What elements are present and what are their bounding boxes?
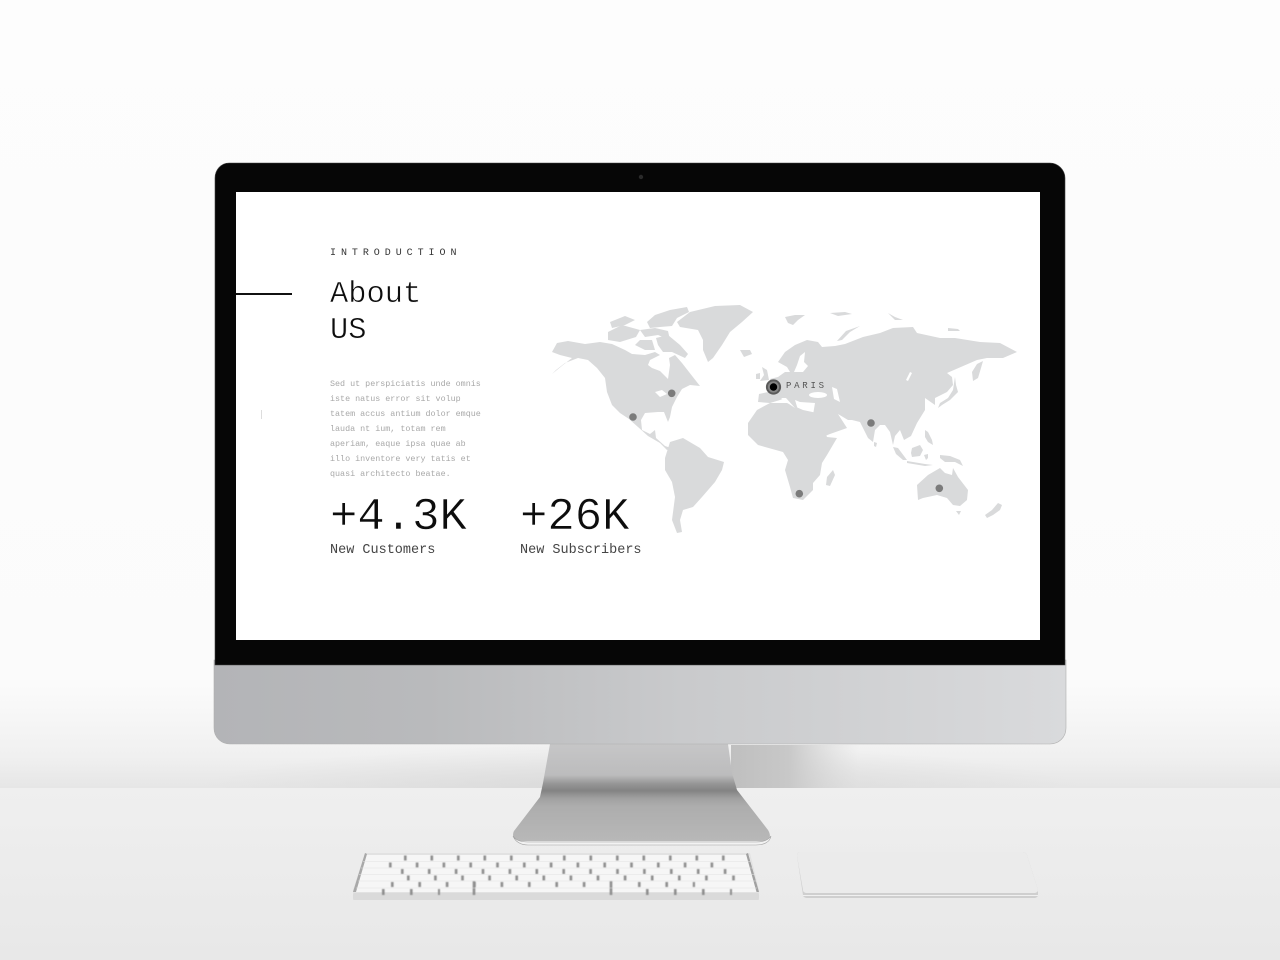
- Sumatra: [893, 447, 907, 460]
- New Guinea: [940, 455, 963, 466]
- Kamchatka shadow island: [972, 361, 983, 381]
- faint page mark: [261, 410, 262, 419]
- marker: New York: [668, 390, 676, 397]
- marker: South Africa: [796, 490, 803, 498]
- text block: slide copy: [330, 248, 642, 558]
- stat: new subscribers: New Subscribers: [520, 543, 642, 558]
- monitor stand: [513, 744, 771, 845]
- Arctic islands: [647, 307, 689, 328]
- key gaps: [382, 858, 740, 895]
- Philippines: [925, 430, 933, 445]
- row separators: [356, 862, 757, 888]
- body paragraph: illo inventore very tatis et: [330, 454, 471, 464]
- keyboard: [353, 853, 759, 900]
- Africa: [748, 403, 837, 500]
- key area: [355, 855, 758, 892]
- monitor chin: [214, 660, 1066, 744]
- inland seas: [655, 352, 912, 408]
- marker: Paris: [766, 379, 781, 395]
- monitor bezel: [215, 163, 1065, 665]
- stat: new subscribers: [520, 491, 642, 558]
- stat: new customers: New Customers: [330, 543, 435, 558]
- Madagascar: [826, 470, 835, 486]
- label: Paris: PARIS: [786, 381, 827, 391]
- Sulawesi: [924, 454, 928, 460]
- marker: Australia: [936, 484, 943, 492]
- Tasmania: [956, 511, 961, 515]
- New Zealand: [985, 503, 1002, 518]
- Eurasia: [758, 327, 1017, 445]
- Borneo: [911, 445, 923, 457]
- Arctic Russia islands: [837, 326, 860, 341]
- world map: [552, 305, 1017, 533]
- Sri Lanka: [874, 442, 877, 447]
- UK and Ireland: [760, 367, 769, 381]
- stat: new customers: +4.3K: [330, 491, 467, 543]
- body paragraph: quasi architecto beatae.: [330, 469, 451, 479]
- shadow behind stand: [731, 745, 859, 788]
- North America: [552, 341, 700, 450]
- Japan: [938, 377, 958, 408]
- marker: Mexico: [629, 413, 637, 421]
- icon: webcam: [639, 175, 643, 179]
- body paragraph: Sed ut perspiciatis unde omnis: [330, 379, 481, 389]
- kicker: introduction: INTRODUCTION: [330, 248, 461, 259]
- marker: India: [867, 419, 875, 427]
- title: US: [330, 314, 366, 348]
- monitor: [214, 163, 1066, 845]
- Iceland: [740, 350, 752, 357]
- body paragraph: iste natus error sit volup: [330, 394, 461, 404]
- body paragraph: lauda nt ium, totam rem: [330, 424, 446, 434]
- Australia: [917, 468, 968, 506]
- stat: new subscribers: +26K: [520, 491, 630, 543]
- map markers: [629, 379, 943, 498]
- Java: [907, 461, 933, 466]
- body paragraph: tatem accus antium dolor emque: [330, 409, 481, 419]
- panel: slide screen: [236, 192, 1040, 640]
- accent line: [236, 293, 292, 295]
- Greenland: [677, 305, 753, 362]
- title: About: [330, 278, 421, 312]
- South America: [665, 438, 724, 533]
- body paragraph: aperiam, eaque ipsa quae ab: [330, 439, 466, 449]
- trackpad: [797, 852, 1038, 898]
